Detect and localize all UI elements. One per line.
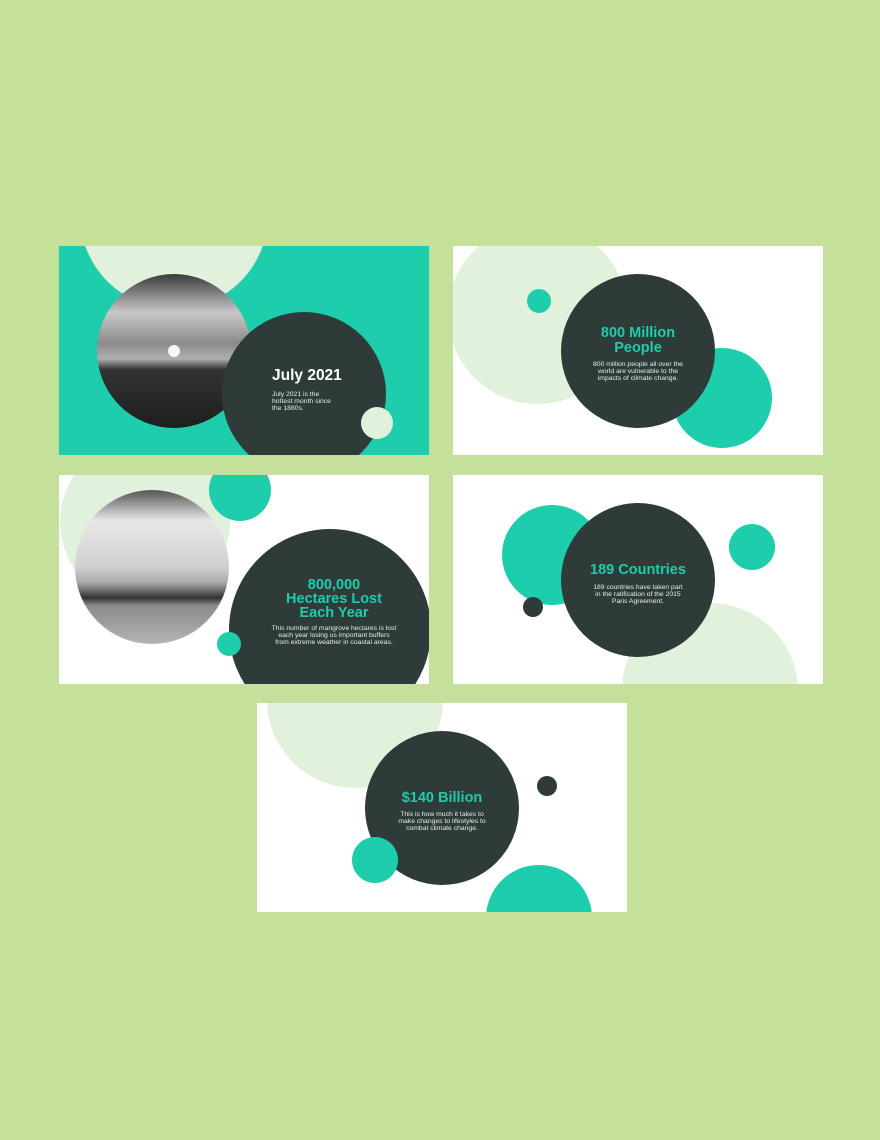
text: countries body: 189 countries have taken part xyxy=(593,584,683,591)
text: hectares body xyxy=(272,626,396,644)
text: July 2021 body: the 1880s. xyxy=(272,405,304,412)
text: 800 million body: impacts of climate change. xyxy=(598,375,678,382)
photo: clouds over field xyxy=(75,490,229,644)
panel: 800 Million People: People xyxy=(614,340,662,356)
text: July 2021 body xyxy=(272,392,331,410)
panel: 800,000 Hectares: Hectares Lost xyxy=(286,591,382,607)
text: 800 million body xyxy=(593,361,683,382)
heading: July 2021: July 2021 xyxy=(272,367,342,384)
panel: 800,000 Hectares: Each Year xyxy=(299,605,369,621)
panel: $140 Billion xyxy=(257,703,627,912)
text: billion body: combat climate change. xyxy=(406,825,478,832)
text: hectares body: each year losing us important buffers xyxy=(278,632,390,639)
text: 800 million body: 800 million people all over the xyxy=(593,361,683,368)
text: billion body: make changes to lifestyles to xyxy=(398,818,486,825)
panel: 800 Million People xyxy=(453,246,823,455)
text: July 2021 body: July 2021 is the xyxy=(272,391,319,398)
text: 800 million body: world are vulnerable to the xyxy=(597,368,678,375)
text: hectares body: from extreme weather in coastal areas. xyxy=(275,639,393,646)
text: countries body xyxy=(593,584,683,605)
text: billion body xyxy=(398,811,486,832)
text: hectares body: This number of mangrove hectares is lost xyxy=(272,625,396,632)
text: countries body: Paris Agreement. xyxy=(612,598,664,605)
text: countries body: in the ratification of the 2015 xyxy=(595,591,681,598)
text: July 2021 body: hottest month since xyxy=(272,398,331,405)
heading: 800 Million People: 800 Million xyxy=(601,325,675,341)
heading: $140 Billion: $140 Billion xyxy=(402,790,482,806)
panel: 189 Countries xyxy=(453,475,823,684)
heading: 800,000 Hectares Lost Each Year: 800,000 xyxy=(308,577,360,593)
heading: 189 Countries: 189 Countries xyxy=(590,562,686,578)
text: billion body: This is how much it takes to xyxy=(400,811,484,818)
panel: July 2021 xyxy=(59,246,429,455)
panel: 800,000 Hectares xyxy=(59,475,429,684)
photo: grass at sunset xyxy=(97,274,251,428)
